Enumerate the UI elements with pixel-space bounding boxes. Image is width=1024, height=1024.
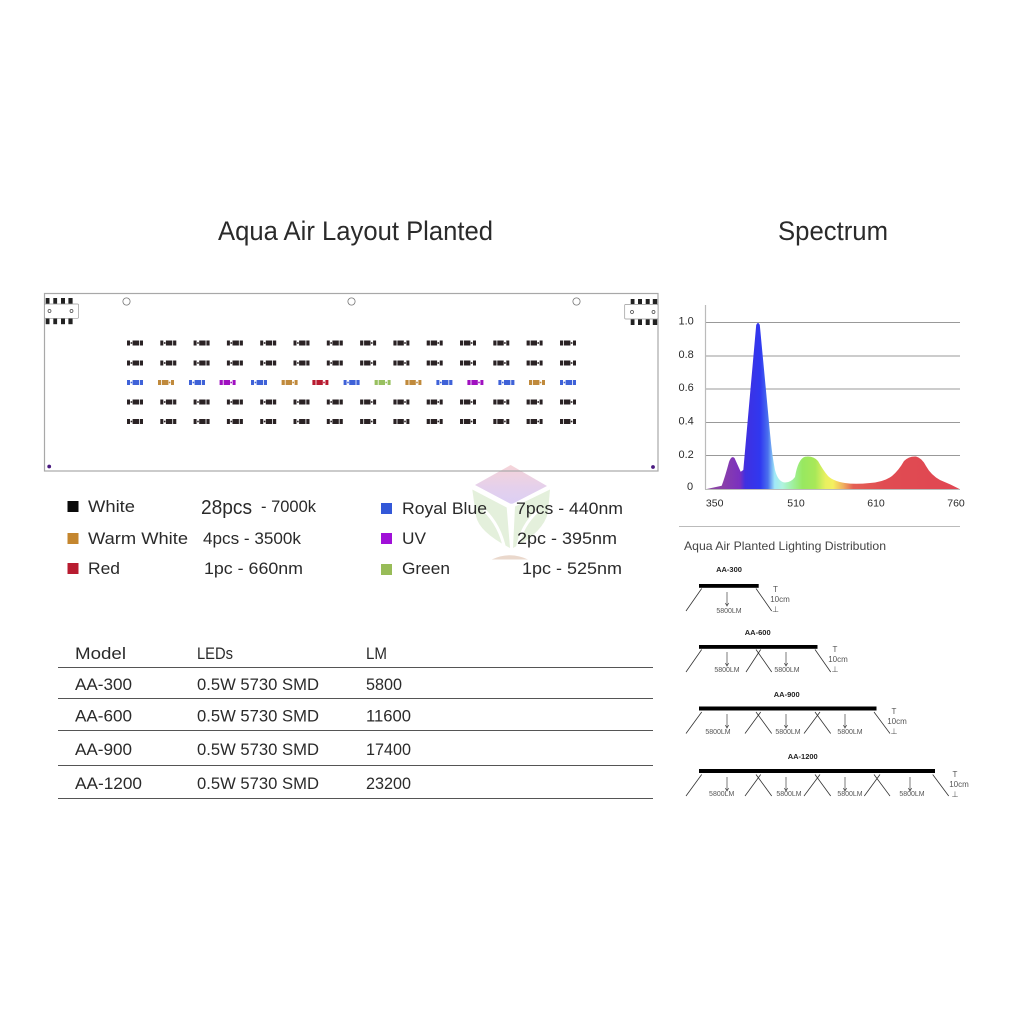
row AA-600 [75, 706, 411, 726]
y axis labels: 0.4 [678, 416, 694, 428]
title: spectrum: Spectrum [778, 216, 888, 246]
white LEDs top rows [127, 340, 576, 366]
row AA-600: AA-600 [75, 706, 132, 726]
legend: royal blue: 7pcs - 440nm [516, 499, 623, 518]
left connector [44, 298, 78, 324]
mounting holes [123, 298, 580, 305]
legend: white: - 7000k [261, 497, 316, 516]
x axis labels: 610 [867, 498, 885, 510]
legend: uv: 2pc - 395nm [517, 529, 617, 548]
legend: uv: UV [402, 529, 427, 548]
x axis labels: 510 [787, 498, 805, 510]
spectrum curve [707, 323, 960, 489]
diagram: AA-900: 5800LM [837, 729, 863, 736]
watermark gem [475, 465, 547, 504]
diagram: AA-600: ⊥ [832, 665, 839, 674]
row AA-1200 [75, 774, 411, 793]
row AA-1200: 23200 [366, 774, 411, 793]
legend: red: Red [88, 559, 120, 578]
legend: warm white: Warm White [88, 529, 188, 548]
diagram: AA-600: 10cm [828, 655, 848, 664]
panel: LED board layout [44, 294, 658, 471]
x axis labels: 350 [706, 498, 724, 510]
diagram: AA-300: 5800LM [716, 608, 742, 615]
row AA-1200: 0.5W 5730 SMD [197, 774, 319, 793]
row AA-300 [75, 675, 402, 694]
row AA-600: 0.5W 5730 SMD [197, 706, 319, 726]
white LEDs bottom rows [127, 400, 576, 424]
legend: red [68, 559, 303, 578]
table header [75, 644, 387, 663]
legend: white: White [88, 497, 135, 516]
diagram: AA-300 [686, 565, 790, 615]
legend: white: 28pcs [201, 497, 252, 519]
legend: green: 1pc - 525nm [522, 559, 622, 578]
heading: lighting distribution: Aqua Air Planted Lighting Distribution [684, 539, 886, 553]
legend: royal blue: Royal Blue [402, 499, 487, 518]
diagram: AA-900: 10cm [887, 717, 907, 726]
y axis labels: 1.0 [678, 316, 694, 328]
table: models [58, 644, 653, 798]
row AA-600: 11600 [366, 706, 411, 726]
table header: LEDs [197, 644, 233, 663]
table header: LM [366, 644, 387, 663]
watermark right leaf [513, 490, 550, 548]
legend: warm white: 4pcs - 3500k [203, 529, 301, 548]
diagram: AA-600: AA-600 [745, 628, 771, 637]
title: layout: Aqua Air Layout Planted [218, 216, 493, 246]
row AA-900: 0.5W 5730 SMD [197, 740, 319, 759]
legend: red: 1pc - 660nm [204, 559, 303, 578]
diagram: AA-1200: T [953, 770, 958, 779]
diagram: AA-600 [686, 628, 848, 674]
diagram: AA-600: T [833, 645, 838, 654]
legend: warm white [68, 529, 301, 548]
diagram: AA-1200: 10cm [949, 780, 969, 789]
board outline [44, 294, 658, 471]
diagram: AA-300: 10cm [770, 595, 790, 604]
legend: royal blue [381, 499, 623, 518]
watermark base arc [492, 555, 528, 560]
row AA-300: 5800 [366, 675, 402, 694]
row AA-300: 0.5W 5730 SMD [197, 675, 319, 694]
corner markers [47, 465, 655, 469]
right connector [625, 299, 658, 325]
diagram: AA-300: AA-300 [716, 565, 742, 574]
diagram: AA-1200: 5800LM [709, 791, 735, 798]
diagram: AA-300: ⊥ [772, 605, 779, 614]
row AA-900 [75, 740, 411, 759]
y axis labels [678, 316, 694, 493]
row AA-900: AA-900 [75, 740, 132, 759]
diagram: AA-600: 5800LM [714, 667, 740, 674]
diagram: AA-1200: 5800LM [899, 791, 925, 798]
x axis labels [706, 498, 965, 510]
diagram: AA-1200 [686, 752, 969, 799]
diagram: AA-900: 5800LM [775, 729, 801, 736]
y axis labels: 0.2 [678, 449, 694, 461]
diagram: AA-300: T [773, 585, 778, 594]
row AA-300: AA-300 [75, 675, 132, 694]
legend: white [68, 497, 316, 519]
row AA-1200: AA-1200 [75, 774, 142, 793]
diagram: AA-900: ⊥ [891, 727, 898, 736]
legend: uv [381, 529, 617, 548]
legend: green [381, 559, 622, 578]
diagram: AA-1200: ⊥ [952, 790, 959, 799]
diagram: AA-900 [686, 690, 907, 736]
spectrum chart [678, 305, 965, 510]
diagram: AA-600: 5800LM [774, 667, 800, 674]
diagram: AA-1200: 5800LM [837, 791, 863, 798]
diagram: AA-900: 5800LM [705, 729, 731, 736]
legend [68, 497, 623, 578]
diagram: AA-900: AA-900 [774, 690, 800, 699]
y axis labels: 0.8 [678, 349, 694, 361]
diagram: AA-1200: 5800LM [776, 791, 802, 798]
diagram: AA-900: T [892, 707, 897, 716]
legend: green: Green [402, 559, 450, 578]
y axis labels: 0 [687, 481, 693, 493]
diagram: AA-1200: AA-1200 [788, 752, 818, 761]
table header: Model [75, 644, 126, 663]
y axis labels: 0.6 [678, 382, 694, 394]
logo watermark [472, 465, 550, 560]
x axis labels: 760 [947, 498, 965, 510]
coloured LED row [127, 380, 576, 385]
watermark swooshes [484, 510, 539, 550]
watermark left leaf [472, 490, 510, 548]
row AA-900: 17400 [366, 740, 411, 759]
